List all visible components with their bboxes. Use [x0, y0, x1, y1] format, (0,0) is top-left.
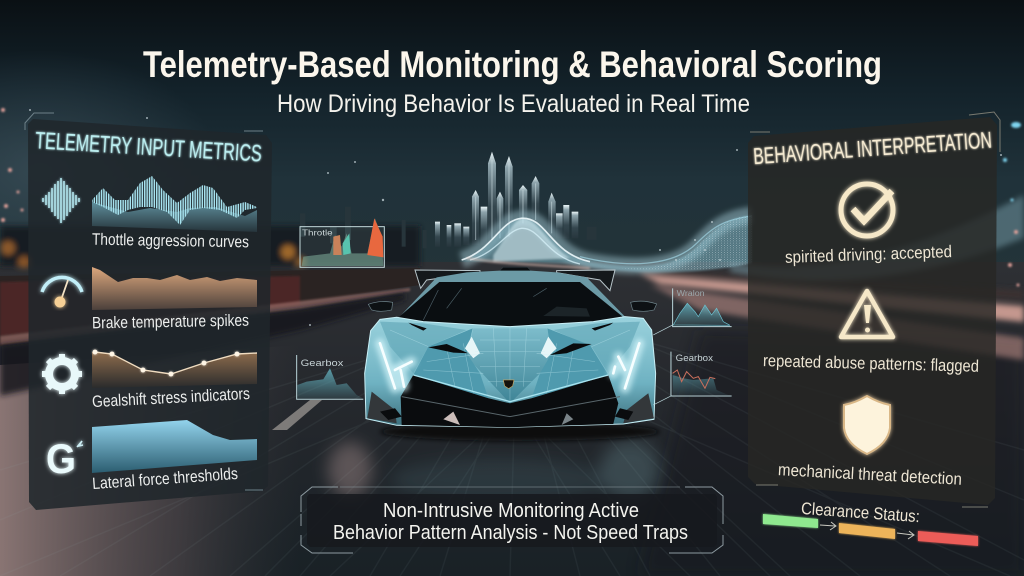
- hood panels: [380, 322, 640, 403]
- road speed streaks: [0, 330, 1024, 576]
- title: Telemetry-Based Monitoring & Behavioral Scoring: [143, 44, 882, 85]
- label: brake: Brake temperature spikes: [92, 312, 249, 332]
- mini chart: gearbox right: [653, 352, 732, 405]
- city skyline: [300, 152, 597, 248]
- chart: gearshift stress: [92, 350, 257, 388]
- label: spirited driving: spirited driving: accepted: [785, 242, 952, 267]
- chart: throttle aggression: [92, 176, 257, 232]
- sports car with wireframe body: [365, 267, 660, 441]
- mini chart: throttle: Throtle: [302, 228, 333, 238]
- road reflections under the car: [328, 440, 660, 502]
- icon: gear: [42, 354, 82, 394]
- car body: [365, 317, 656, 427]
- lane marking: [272, 400, 322, 430]
- mini chart: gearbox right: Gearbox: [676, 353, 713, 363]
- bar: amber: [839, 523, 895, 539]
- right light-trail bands: [640, 268, 1024, 360]
- arrow: green to amber: [820, 522, 836, 530]
- car badge: [503, 380, 514, 389]
- mini chart: throttle: [300, 218, 384, 267]
- mini chart: gearbox left: [297, 355, 363, 399]
- clearance status: [763, 499, 978, 546]
- label: mechanical threat: mechanical threat detection: [778, 460, 962, 489]
- clearance heading: Clearance Status:: [800, 499, 920, 526]
- mini chart: upper right: [653, 288, 732, 335]
- icon: warning triangle: [841, 291, 893, 337]
- bar: green: [763, 514, 818, 528]
- lower front fascia: [367, 375, 654, 427]
- icon: check circle: [841, 184, 893, 236]
- roof and windshield: [395, 267, 628, 328]
- mini chart: gearbox left: Gearbox: [301, 358, 344, 368]
- icon: waveform: [43, 178, 79, 223]
- panel heading: TELEMETRY INPUT METRICS: [34, 127, 263, 168]
- hood vents: [408, 323, 613, 355]
- icon: gauge: [42, 277, 82, 308]
- icon: G force: G: [46, 435, 76, 482]
- headlights: [380, 343, 639, 388]
- label: gearshift: Gealshift stress indicators: [92, 385, 250, 411]
- bar: red: [918, 531, 978, 546]
- subtitle: How Driving Behavior Is Evaluated in Real Time: [277, 90, 750, 118]
- arrow: amber to red: [897, 531, 914, 539]
- label: repeated abuse: repeated abuse patterns: flagged: [763, 351, 979, 376]
- particles: [1, 108, 1021, 327]
- mirrors: [368, 301, 657, 311]
- callout: monitoring status: [301, 487, 723, 553]
- callout line 1: Non-Intrusive Monitoring Active: [383, 499, 639, 522]
- glowing telemetry data wave: [462, 195, 1024, 281]
- car shadow: [380, 422, 660, 441]
- panel: telemetry input metrics: [25, 113, 272, 510]
- label: throttle: Thottle aggression curves: [92, 231, 249, 251]
- callout line 2: Behavior Pattern Analysis - Not Speed Traps: [333, 521, 688, 544]
- distant treeline and left city glow: [0, 226, 420, 268]
- chart: lateral force: [92, 420, 257, 473]
- hood wireframe grid: [390, 327, 630, 403]
- label: lateral force: Lateral force thresholds: [92, 465, 239, 493]
- mini chart: upper right: Wralon: [677, 289, 705, 298]
- rear wing: [415, 270, 615, 291]
- icon: shield: [844, 396, 890, 454]
- left guardrail: [0, 268, 420, 396]
- panel: behavioral interpretation: [748, 112, 1000, 507]
- chart: brake temperature: [92, 267, 257, 310]
